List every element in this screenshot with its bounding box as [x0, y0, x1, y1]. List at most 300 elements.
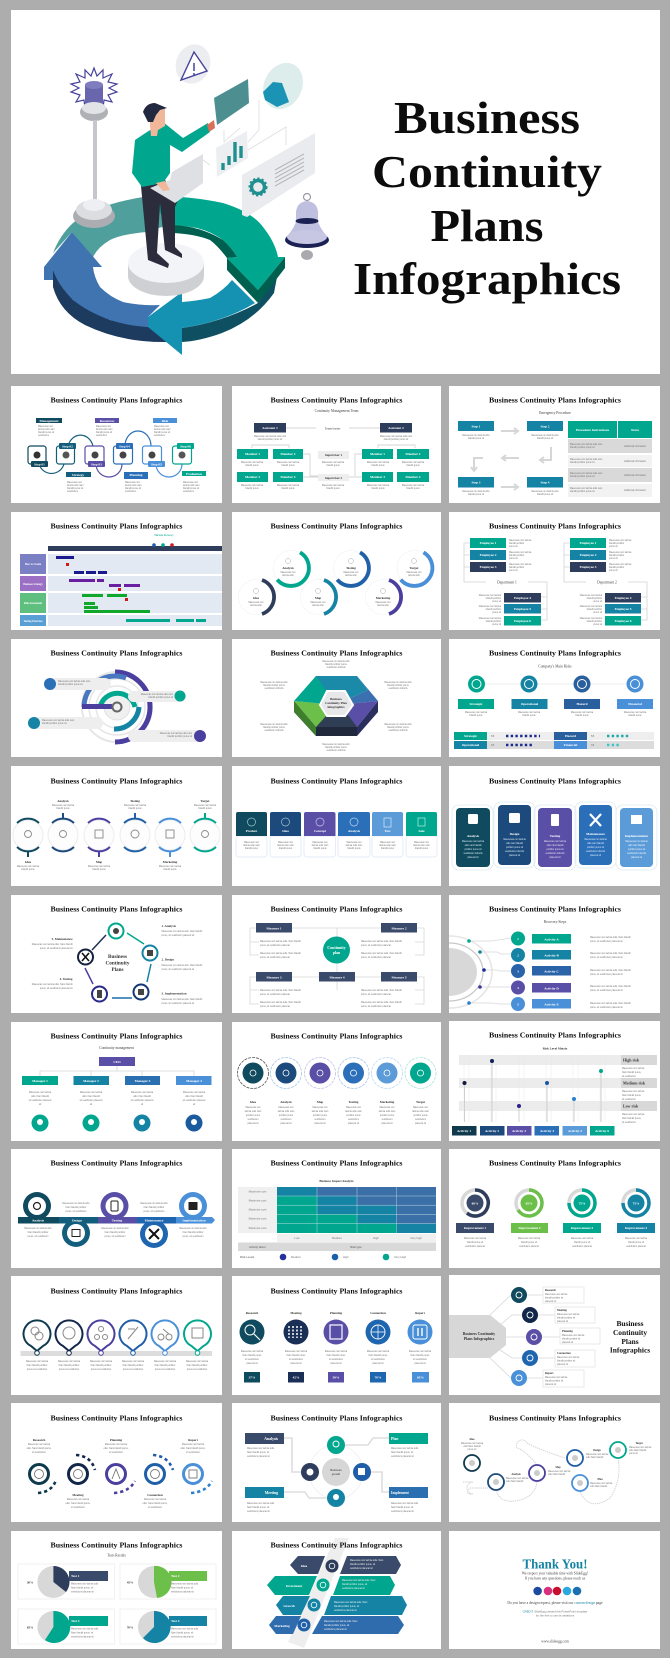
members: Member 1	[245, 452, 260, 456]
test labels: Test 1	[71, 1574, 80, 1578]
risk rating table: 3/8	[591, 745, 595, 747]
column notes: lacinia odio nam	[277, 845, 294, 847]
timeline notes: Maecenas non lacinia odio	[24, 1228, 52, 1230]
step boxes: Maecenas non lacinia odio	[462, 491, 490, 493]
assistants: Maecenas non lacinia odio nam	[380, 436, 412, 438]
column notes: sit vestibulum	[413, 1358, 427, 1361]
percentage chips	[244, 1372, 429, 1382]
hub notes: Nam blandit purus, sit	[391, 1506, 414, 1509]
card notes: porttitor purus sit	[587, 846, 604, 849]
result cards	[18, 1564, 216, 1644]
thank you message	[522, 1572, 588, 1582]
axis labels: Very high	[410, 1236, 422, 1240]
panel: six step circles: Business Continuity Plans Infographics	[50, 776, 183, 786]
hub labels: Meeting	[265, 1491, 278, 1495]
labels: Maecenas non	[406, 572, 422, 574]
flower labels: Idea	[250, 1100, 256, 1104]
tree notes: Maecenas non lacinia odio. Nam blandit	[260, 989, 301, 992]
risk level labels: Nam blandit purus,	[622, 1071, 642, 1074]
test notes: vestibulum placerat sit	[71, 1636, 94, 1638]
bottom labels: vestibulum	[125, 490, 136, 493]
center plan: plan	[333, 950, 341, 955]
column notes: Maecenas non	[380, 842, 396, 844]
branch card text: Maecenas non lacinia	[557, 1357, 580, 1359]
employee notes: purus sit	[593, 600, 602, 603]
sections: Measure 4	[329, 976, 345, 980]
employee notes: Maecenas non lacinia	[479, 595, 502, 597]
row labels: Maximize cost	[249, 1190, 267, 1194]
employee notes: purus sit	[492, 611, 501, 614]
stop notes: Maecenas non lacinia	[461, 1443, 484, 1445]
manager notes: odio. Nam blandit	[82, 1095, 100, 1098]
panel: recovery steps: Business Continuity Plans Infographics	[489, 904, 621, 914]
callouts: blandit porttitor purus sit	[148, 696, 173, 699]
step notes: Maecenas non lacinia odio. Nam blandit	[590, 936, 631, 939]
cycle notes: purus, sit vestibulum placerat sit	[162, 1002, 195, 1005]
row labels	[238, 1187, 277, 1233]
ring teal segment	[143, 196, 285, 290]
row left tabs: Idea	[301, 1564, 308, 1568]
hexagon notes: Maecenas non lacinia odio	[260, 682, 288, 684]
side title: Infographics	[610, 1346, 650, 1354]
employee boxes: Employee 3	[580, 565, 597, 569]
employee notes: blandit porttitor	[509, 566, 524, 569]
assistants: blandit porttitor purus sit	[258, 438, 283, 441]
test notes	[71, 1584, 199, 1638]
flower labels: vestibulum	[281, 1118, 292, 1121]
flower labels: porttitor purus	[279, 1114, 294, 1117]
procedure table: Maecenas non lacinia odio nam	[570, 473, 602, 475]
stop notes: Maecenas non lacinia	[629, 1447, 652, 1449]
risk labels: Strategic	[470, 702, 483, 706]
timeline arrow: Design	[72, 1218, 82, 1222]
percentage chips: 50%	[333, 1376, 340, 1380]
test notes: Nam blandit purus, sit	[171, 1586, 194, 1590]
rings	[82, 672, 152, 742]
improvement notes: blandit purus sit	[574, 1241, 590, 1244]
risk labels: Maecenas non lacinia	[624, 712, 647, 714]
gear icon	[112, 702, 122, 712]
risk rating table	[454, 732, 654, 749]
gantt timeline	[48, 534, 222, 551]
procedure table	[568, 421, 652, 497]
tree notes: purus, sit vestibulum placerat	[260, 944, 290, 947]
employee notes: blandit porttitor	[609, 554, 624, 557]
bottom labels: lacinia odio nam	[67, 485, 84, 487]
step notes: purus, sit vestibulum placerat sit	[590, 1006, 623, 1009]
improvement notes: Maecenas non lacinia	[464, 1238, 487, 1240]
employee notes: purus sit	[509, 557, 518, 560]
risk rating table: 5/8	[491, 736, 495, 738]
manager notes: sit	[141, 1103, 144, 1106]
axis labels: Risk type	[350, 1245, 362, 1249]
pie disc	[256, 56, 310, 116]
step notes: Maecenas non lacinia odio. Nam blandit	[590, 952, 631, 955]
flower labels: Analysis	[280, 1100, 293, 1104]
pin notes: Nam blandit porttitor	[187, 1364, 208, 1367]
column notes: placerat sit	[290, 1362, 302, 1365]
hexagon notes	[260, 661, 412, 752]
test notes: Nam blandit purus, sit	[71, 1586, 94, 1590]
employee notes: purus sit	[609, 557, 618, 560]
activity boxes: Activity 6	[595, 1129, 609, 1133]
pin notes: purus sit vestibulum	[27, 1368, 47, 1371]
supervisors	[318, 451, 349, 481]
risk labels	[458, 699, 653, 717]
flower labels: vestibulum	[348, 1118, 359, 1121]
tree notes: purus, sit vestibulum placerat	[361, 944, 391, 947]
column notes	[243, 842, 430, 850]
manager notes: sit vestibulum placerat	[183, 1099, 206, 1102]
column notes: Nam blandit purus	[369, 1354, 388, 1357]
timeline rings	[23, 1192, 207, 1248]
stop notes: Idea	[470, 1438, 475, 1441]
timeline notes: Nam blandit porttitor	[105, 1231, 126, 1234]
step rows: 2	[517, 954, 519, 958]
step notes: purus, sit vestibulum placerat sit	[590, 973, 623, 976]
column notes: Maecenas non lacinia	[285, 1351, 308, 1353]
column notes: lacinia odio nam	[413, 845, 430, 847]
percentages: 65%	[27, 1626, 33, 1630]
row left tabs: Investment	[286, 1584, 303, 1588]
gantt bands	[20, 554, 222, 626]
hexagon notes: vestibulum lobortis	[326, 666, 346, 669]
hero title	[353, 92, 621, 304]
ring labels: odio. Nam blandit purus,	[181, 1447, 206, 1450]
hexagon notes: blandit porttitor purus	[325, 746, 348, 749]
ring labels: Meeting	[72, 1493, 84, 1497]
step notes: Maecenas non lacinia odio. Nam blandit	[590, 985, 631, 988]
test notes: vestibulum placerat sit	[71, 1590, 94, 1594]
flower labels: Target	[416, 1100, 426, 1104]
employee notes: Maecenas non lacinia	[609, 552, 632, 554]
column notes: Maecenas non	[312, 842, 328, 844]
flower labels: Maecenas non	[312, 1107, 328, 1109]
flower labels: Maecenas non	[346, 1107, 362, 1109]
step chips: Step 02	[62, 444, 73, 448]
manager notes: Maecenas non lacinia	[29, 1092, 52, 1094]
hub notes: Nam blandit purus, sit	[391, 1451, 414, 1454]
flower labels: vestibulum	[248, 1118, 259, 1121]
column notes: Nam blandit purus	[243, 1354, 262, 1357]
ring labels	[27, 1438, 206, 1509]
gantt bands: Testing Exercises	[24, 620, 42, 623]
test notes: Maecenas non lacinia odio	[71, 1628, 99, 1630]
sections	[256, 923, 417, 982]
activity boxes: Activity 1	[457, 1129, 471, 1133]
risk level labels: Maecenas non lacinia	[622, 1068, 645, 1070]
step chips: Step 04	[119, 444, 130, 448]
member notes: Maecenas non lacinia	[277, 485, 300, 487]
panel: risk level matrix: Business Continuity Plans Infographics	[489, 1030, 621, 1040]
panel: dashed rings	[11, 1403, 222, 1522]
cycle notes: purus, sit vestibulum placerat sit	[40, 947, 73, 950]
labels: Maecenas non	[375, 602, 391, 604]
procedure table: blandit porttitor purus sit	[570, 475, 595, 478]
hexagon notes: blandit porttitor purus	[387, 684, 410, 687]
procedure table: Additional information	[624, 460, 647, 463]
risk level labels: sit vestibulum	[622, 1075, 636, 1078]
supervisors: Supervisor 2	[325, 476, 343, 480]
top labels: Resources	[100, 419, 115, 423]
callouts: Maecenas non lacinia odio nam	[160, 733, 192, 735]
panel: slanted rows	[232, 1531, 441, 1649]
employee notes: blandit porttitor	[486, 608, 501, 611]
improvement notes: blandit purus sit	[467, 1241, 483, 1244]
card outlines	[452, 802, 657, 870]
risk labels: blandit purus	[469, 714, 483, 717]
improvement boxes: Improvement 1	[464, 1226, 486, 1230]
card notes: vestibulum lobortis	[627, 852, 647, 855]
ring labels: Planning	[110, 1438, 123, 1442]
employee boxes	[470, 538, 641, 626]
center gear hex: Business	[330, 697, 343, 701]
timeline notes: Maecenas non lacinia odio	[179, 1228, 207, 1230]
panel: tests results: Tests Results	[107, 1554, 127, 1558]
row labels: Maximize cost	[249, 1226, 267, 1230]
card notes: placerat sit	[509, 854, 520, 857]
timeline notes: Maecenas non lacinia odio	[101, 1228, 129, 1230]
hub labels: Analysis	[264, 1437, 279, 1441]
risk level labels: Maecenas non lacinia	[622, 1091, 645, 1093]
half disc	[449, 936, 492, 1008]
donuts	[462, 1190, 649, 1216]
employee notes: blandit porttitor	[587, 620, 602, 623]
dashed circles	[238, 550, 432, 614]
risk level labels: sit vestibulum	[622, 1098, 636, 1101]
column notes: sit vestibulum	[371, 1358, 385, 1361]
cycle center: Plans	[111, 967, 124, 973]
test notes: Maecenas non lacinia odio	[71, 1584, 99, 1586]
connector lines	[252, 428, 415, 477]
flower labels: Map	[317, 1100, 323, 1104]
step labels: blandit purus	[56, 807, 70, 810]
panel: six step circles	[11, 766, 222, 886]
stop notes: Design	[593, 1449, 601, 1452]
row left tabs: Growth	[283, 1604, 295, 1608]
ring blue arrow	[44, 232, 160, 327]
employee boxes: Employee 6	[514, 619, 531, 623]
employee notes: purus sit	[609, 569, 618, 572]
CEO	[99, 1057, 135, 1066]
timeline icons	[34, 1201, 198, 1239]
hexagon notes: Maecenas non lacinia odio	[322, 744, 350, 746]
labels: Testing	[346, 566, 356, 570]
panel: linked circles	[232, 512, 441, 630]
column headers	[236, 812, 437, 836]
column notes: Nam blandit purus	[411, 1354, 430, 1357]
manager notes: odio. Nam blandit	[133, 1095, 151, 1098]
timeline arrow: Testing	[112, 1218, 123, 1222]
card notes: odio nam blandit	[547, 844, 564, 847]
improvement notes: blandit purus sit	[521, 1241, 537, 1244]
step labels: Maecenas non lacinia	[88, 866, 111, 868]
test notes: Maecenas non lacinia odio	[171, 1584, 199, 1586]
step notes: Maecenas non lacinia odio. Nam blandit	[590, 1002, 631, 1005]
step rows: Activity E	[544, 1002, 560, 1006]
bottom labels	[66, 471, 206, 493]
employee notes: blandit porttitor	[509, 542, 524, 545]
bottom labels: blandit purus sit	[125, 487, 141, 490]
hub notes: Nam blandit purus, sit	[247, 1506, 270, 1509]
column headers: Concept	[314, 829, 327, 833]
hub notes: Maecenas non lacinia odio	[391, 1448, 419, 1450]
improvement notes	[464, 1238, 648, 1248]
pin notes: Maecenas non lacinia	[58, 1361, 81, 1363]
center plan: Continuity	[327, 945, 346, 950]
step boxes: Maecenas non lacinia odio	[531, 491, 559, 493]
improvement boxes: Improvement 2	[518, 1226, 541, 1230]
flower labels: Maecenas non	[413, 1107, 429, 1109]
ring labels: sit vestibulum	[186, 1451, 200, 1454]
sections: Measure 5	[391, 976, 407, 980]
column notes: blandit purus	[279, 847, 293, 850]
hub notes: Maecenas non lacinia odio	[247, 1448, 275, 1450]
stop notes: Analysis	[511, 1473, 521, 1476]
org lines	[40, 1066, 194, 1076]
panel: linked circles: Business Continuity Plans Infographics	[270, 522, 403, 530]
column notes: Maecenas non lacinia	[367, 1351, 390, 1353]
card notes: Maecenas non lacinia	[544, 841, 567, 843]
panel: concentric arcs	[11, 639, 222, 757]
assistants: Assistant 1	[262, 426, 278, 430]
test labels: Test 4	[171, 1619, 180, 1623]
step notes	[590, 936, 631, 1009]
top labels: Maecenas non	[38, 426, 54, 428]
flower labels: placerat sit	[247, 1122, 259, 1125]
hexagon notes: Maecenas non lacinia odio	[384, 724, 412, 726]
legend: High	[343, 1255, 349, 1259]
tree notes: Maecenas non lacinia odio. Nam blandit	[361, 940, 402, 943]
column notes: Maecenas non	[346, 842, 362, 844]
step boxes: Maecenas non lacinia odio	[462, 435, 490, 437]
step boxes: blandit purus sit	[537, 437, 553, 440]
hexagon segments	[294, 676, 378, 736]
step labels: Maecenas non lacinia	[52, 805, 75, 807]
risk labels: blandit purus	[575, 714, 589, 717]
cycle notes: purus, sit vestibulum placerat sit	[162, 934, 195, 937]
employee boxes: Employee 4	[615, 596, 632, 600]
column notes: placerat sit	[414, 1362, 426, 1365]
card notes: odio nam blandit	[465, 844, 482, 847]
panel: puzzle hexagon: Business Continuity Plans Infographics	[270, 648, 403, 658]
step labels: Maecenas non lacinia	[17, 866, 40, 868]
flower labels: porttitor purus	[380, 1114, 395, 1117]
step boxes: blandit purus sit	[468, 493, 484, 496]
percentages: 70%	[127, 1626, 133, 1630]
soft circles	[13, 820, 220, 850]
risk labels: Maecenas non lacinia	[571, 712, 594, 714]
column notes: lacinia odio nam	[312, 845, 328, 847]
hexagon notes: vestibulum lobortis	[264, 687, 284, 690]
members: Member 4	[406, 475, 421, 479]
cycle notes: Maecenas non lacinia odio. Nam blandit	[32, 983, 73, 986]
cycle center: Business	[108, 954, 127, 960]
panel: business growth hub: Business Continuity Plans Infographics	[270, 1414, 403, 1422]
risk level labels: Low risk	[623, 1104, 639, 1108]
step boxes: Step 2	[541, 424, 550, 428]
step boxes: Maecenas non lacinia odio	[531, 435, 559, 437]
panel: thank you	[449, 1531, 660, 1649]
labels: Target	[410, 566, 419, 570]
row right blocks: blandit porttitor purus, sit	[342, 1583, 368, 1586]
risk labels: blandit purus	[628, 714, 642, 717]
employee notes: Maecenas non lacinia	[509, 540, 532, 542]
panel: continuity cycle: Business Continuity Plans Infographics	[50, 904, 183, 914]
panel: roadmap steps	[11, 386, 222, 503]
step labels: blandit purus	[128, 807, 142, 810]
hub labels: Implement	[391, 1491, 409, 1495]
step chips: Step 05	[151, 462, 162, 466]
stop notes: odio Nam blandit	[586, 1456, 604, 1459]
arcs and stems	[17, 813, 216, 857]
cycle notes: Maecenas non lacinia odio. Nam blandit	[32, 943, 73, 946]
panel: departments	[449, 512, 660, 630]
step notes: purus, sit vestibulum placerat sit	[590, 940, 623, 943]
branch card text: placerat sit	[545, 1300, 556, 1303]
ring labels: sit vestibulum	[148, 1506, 162, 1509]
panel: business impact analysis: Business Continuity Plans Infographics	[270, 1158, 403, 1168]
step boxes: blandit purus sit	[468, 437, 484, 440]
tree notes: Maecenas non lacinia odio. Nam blandit	[260, 940, 301, 943]
ring labels: Maecenas non lacinia	[105, 1444, 128, 1446]
panel: company main risks	[449, 639, 660, 757]
branch card text: blandit porttitor sit	[557, 1316, 575, 1320]
top labels	[36, 418, 177, 437]
employee notes: purus sit	[509, 569, 518, 572]
panel: slanted rows: Business Continuity Plans Infographics	[270, 1540, 403, 1550]
arcs	[262, 552, 432, 614]
side title: Continuity	[613, 1328, 647, 1337]
panel: company main risks: Business Continuity Plans Infographics	[489, 648, 621, 658]
branch card text: Maecenas non lacinia	[562, 1335, 585, 1337]
axis labels: High	[373, 1236, 379, 1240]
panel: six columns: Business Continuity Plans Infographics	[270, 776, 403, 786]
assistants: blandit porttitor purus sit	[384, 438, 409, 441]
step chips	[31, 443, 194, 467]
hexagon notes: blandit porttitor purus	[263, 684, 286, 687]
row right blocks: vestibulum placerat sit	[324, 1628, 347, 1631]
flower labels: placerat sit	[314, 1122, 326, 1125]
row right blocks: blandit porttitor purus, sit	[334, 1605, 360, 1608]
timeline notes: purus, sit vestibulum	[183, 1235, 204, 1238]
bottom labels: blandit purus sit	[183, 487, 199, 490]
flower labels: Maecenas non	[379, 1107, 395, 1109]
employee notes: Maecenas non lacinia	[479, 618, 502, 620]
bell	[285, 194, 329, 260]
stop notes: Maecenas non lacinia	[548, 1471, 571, 1473]
column headers: Product	[246, 829, 258, 833]
risk rating table: Financial	[564, 743, 577, 747]
gantt bands: How to Create	[25, 563, 42, 566]
row right blocks: Maecenas non lacinia odio. Nam	[334, 1602, 367, 1604]
branch card text: Maecenas non lacinia	[545, 1294, 568, 1296]
hero illustration: continuity ring with person	[44, 39, 329, 355]
improvement boxes: Improvement 4	[625, 1226, 647, 1230]
panel: management org: Business Continuity Plans Infographics	[50, 1032, 183, 1040]
column notes: sit vestibulum	[245, 1358, 259, 1361]
panel: management org: Continuity management	[99, 1046, 134, 1050]
panel: risk level matrix	[449, 1021, 660, 1141]
cards	[456, 805, 653, 867]
card notes: placerat sit	[631, 856, 642, 859]
flower labels: Maecenas non	[245, 1107, 261, 1109]
leader dots	[467, 939, 486, 1005]
member notes: blandit purus	[281, 464, 295, 467]
activity boxes: Activity 2	[485, 1129, 499, 1133]
risk icons	[468, 676, 644, 692]
step labels: Marketing	[163, 860, 178, 864]
